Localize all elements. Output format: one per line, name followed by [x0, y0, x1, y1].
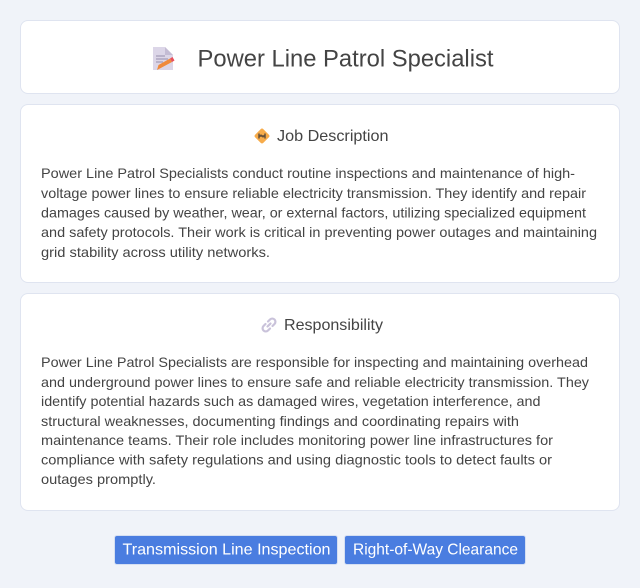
icon: chain link — [262, 318, 276, 332]
text block: job description: Power Line Patrol Specialists conduct routine inspections and maintenance of high- — [41, 165, 575, 181]
text block: responsibility: compliance with safety regulations and using diagnostic tools to detect faults or — [41, 452, 552, 468]
button: right-of-way clearance: Right-of-Way Clearance — [353, 542, 518, 558]
text block: responsibility — [41, 354, 589, 487]
text block: responsibility: identify potential hazards such as damaged wires, vegetation interference, and — [41, 393, 540, 409]
title: Power Line Patrol Specialist — [198, 46, 494, 72]
text block: job description: grid stability across utility networks. — [41, 244, 270, 260]
heading: job description: Job Description — [277, 128, 388, 145]
icon: orange diamond — [254, 128, 270, 144]
text block: responsibility: structural weaknesses, documenting findings and coordinating repairs with — [41, 413, 519, 429]
button: right-of-way clearance — [344, 535, 526, 565]
panel: job description — [20, 104, 620, 283]
button: transmission line inspection — [114, 535, 338, 565]
button: transmission line inspection: Transmission Line Inspection — [122, 542, 331, 558]
text block: job description — [41, 165, 597, 260]
heading: responsibility: Responsibility — [284, 317, 383, 334]
text block: responsibility: Power Line Patrol Specialists are responsible for inspecting and maintaining overhead — [41, 354, 588, 370]
text block: responsibility: outages promptly. — [41, 471, 156, 487]
text block: job description: damages caused by weather, wear, or external factors, utilizing specialized equipment — [41, 204, 586, 220]
text block: job description: and safety protocols. Their work is critical in preventing power outages and maintaining — [41, 224, 597, 240]
text block: responsibility: maintenance teams. Their role includes monitoring power line infrastructures for — [41, 432, 553, 448]
text block: job description: voltage power lines to ensure reliable electricity transmission. They identify and repair — [41, 185, 586, 201]
text block: responsibility: and underground power lines to ensure safe and reliable electricity transmission. They — [41, 374, 589, 390]
panel: title card — [20, 20, 620, 94]
panel: responsibility — [20, 293, 620, 511]
icon: memo with pencil — [153, 47, 174, 70]
